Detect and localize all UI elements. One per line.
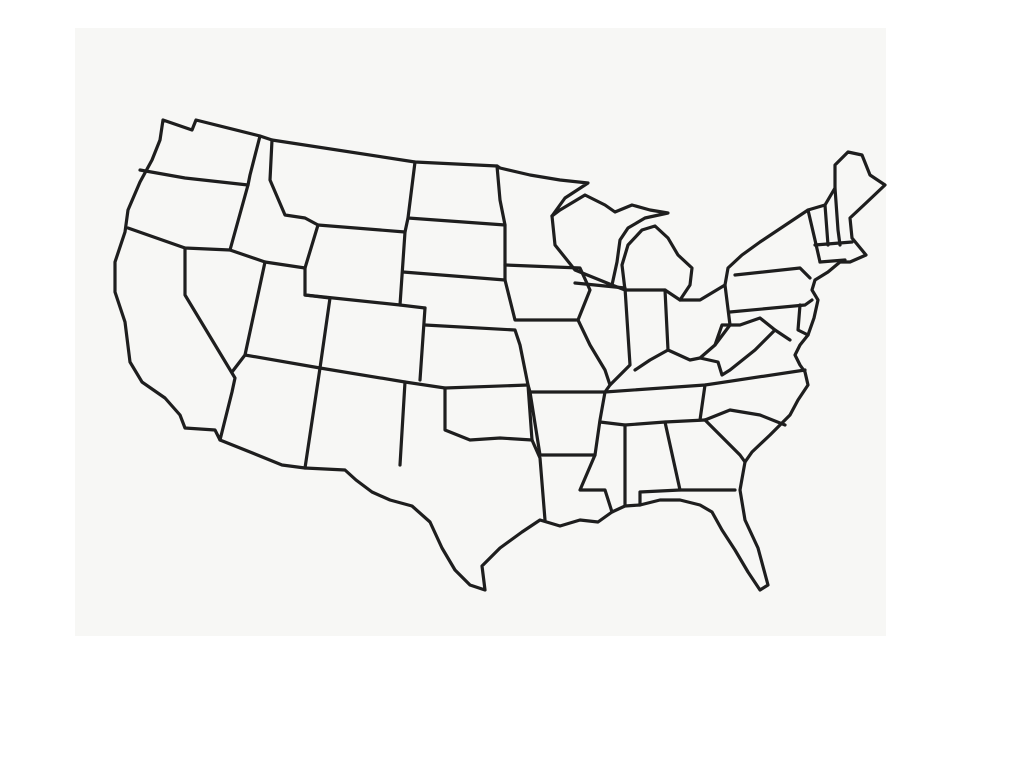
state borders [140,170,248,185]
outer boundary [115,120,885,590]
panel: map background [75,28,886,636]
